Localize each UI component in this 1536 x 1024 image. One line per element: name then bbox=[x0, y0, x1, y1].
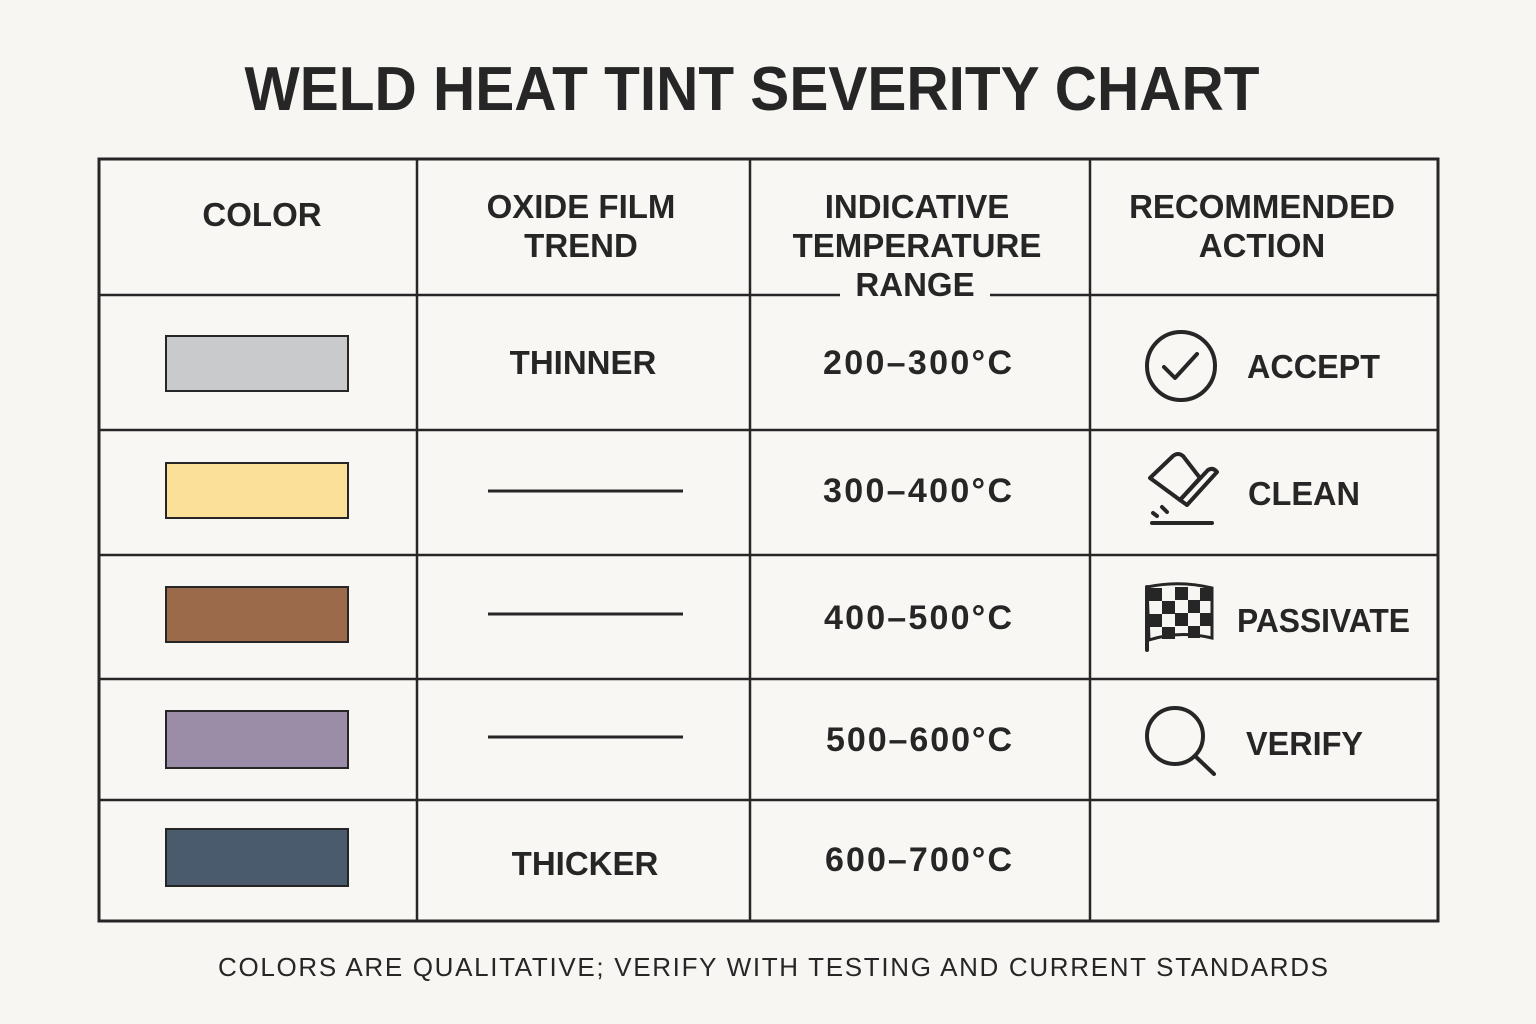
header row: OXIDE FILM bbox=[487, 188, 675, 225]
temperature ranges: 400–500°C bbox=[824, 599, 1012, 637]
action: passivate: PASSIVATE bbox=[1237, 602, 1410, 639]
header row: RANGE bbox=[855, 266, 975, 303]
footer note: COLORS ARE QUALITATIVE; VERIFY WITH TESTING AND CURRENT STANDARDS bbox=[218, 952, 1328, 982]
oxide film trend column: THINNER bbox=[510, 344, 656, 381]
icon: check circle bbox=[1147, 332, 1215, 400]
table bbox=[99, 159, 1438, 921]
header row: RECOMMENDED bbox=[1129, 188, 1395, 225]
oxide film trend column bbox=[488, 344, 683, 882]
header row: COLOR bbox=[202, 196, 322, 233]
action: verify: VERIFY bbox=[1246, 725, 1363, 762]
temperature ranges bbox=[823, 344, 1012, 879]
color swatches bbox=[166, 336, 348, 886]
header row: TREND bbox=[524, 227, 638, 264]
oxide film trend column: THICKER bbox=[512, 845, 658, 882]
temperature ranges: 300–400°C bbox=[823, 472, 1012, 510]
header row: ACTION bbox=[1199, 227, 1325, 264]
header row bbox=[202, 188, 1395, 303]
action: clean: CLEAN bbox=[1248, 475, 1360, 512]
icon: magnifier bbox=[1147, 708, 1214, 774]
icon: eraser bbox=[1150, 454, 1217, 523]
action: accept: ACCEPT bbox=[1247, 348, 1380, 385]
title: WELD HEAT TINT SEVERITY CHART bbox=[244, 55, 1260, 124]
temperature ranges: 600–700°C bbox=[825, 841, 1012, 879]
icon: checkered flag bbox=[1147, 584, 1212, 650]
header row: INDICATIVE bbox=[825, 188, 1009, 225]
temperature ranges: 500–600°C bbox=[826, 721, 1012, 759]
header row: TEMPERATURE bbox=[793, 227, 1041, 264]
temperature ranges: 200–300°C bbox=[823, 344, 1012, 382]
